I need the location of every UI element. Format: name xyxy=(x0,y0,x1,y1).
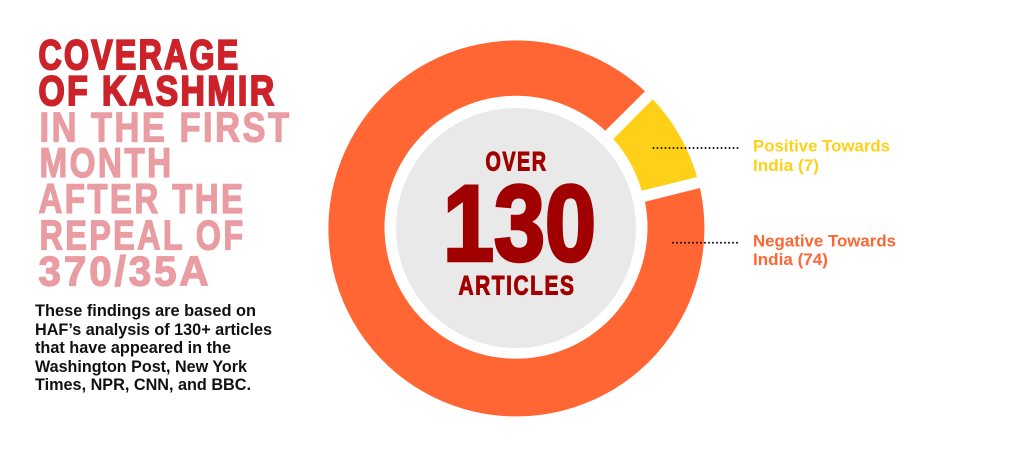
centre label xyxy=(443,146,596,300)
title: subdued line 7: 370/35A xyxy=(38,248,212,294)
title: subdued line 4: MONTH xyxy=(40,139,174,186)
description line 5: Times, NPR, CNN, and BBC. xyxy=(35,376,251,394)
leader line: positive xyxy=(654,147,740,149)
donut chart xyxy=(328,40,704,416)
title: subdued line 6: REPEAL OF xyxy=(40,212,246,258)
legend: negative towards India xyxy=(753,232,896,269)
negative segment (74) xyxy=(328,40,704,416)
legend negative line 2: India (74) xyxy=(753,251,828,269)
title: emphasised line 1: COVERAGE xyxy=(38,31,240,78)
title: subdued line 3: IN THE FIRST xyxy=(40,104,292,150)
centre circle xyxy=(396,108,636,348)
description line 4: Washington Post, New York xyxy=(35,358,248,376)
legend: positive towards India xyxy=(753,138,890,175)
leader line: negative xyxy=(673,242,740,244)
centre label: articles: ARTICLES xyxy=(458,270,576,300)
title xyxy=(38,31,292,294)
description line 3: that have appeared in the xyxy=(35,339,231,357)
centre label: 130: 130 xyxy=(443,162,596,284)
centre label: over: OVER xyxy=(486,146,548,176)
description line 2: HAF’s analysis of 130+ articles xyxy=(35,321,272,339)
description text block xyxy=(35,302,272,394)
title: emphasised line 2: OF KASHMIR xyxy=(38,67,276,114)
title: subdued line 5: AFTER THE xyxy=(38,175,246,222)
legend negative line 1: Negative Towards xyxy=(753,232,896,250)
description line 1: These findings are based on xyxy=(35,302,256,320)
positive segment (7) xyxy=(613,99,697,191)
legend positive line 2: India (7) xyxy=(753,157,819,175)
legend positive line 1: Positive Towards xyxy=(753,138,890,156)
